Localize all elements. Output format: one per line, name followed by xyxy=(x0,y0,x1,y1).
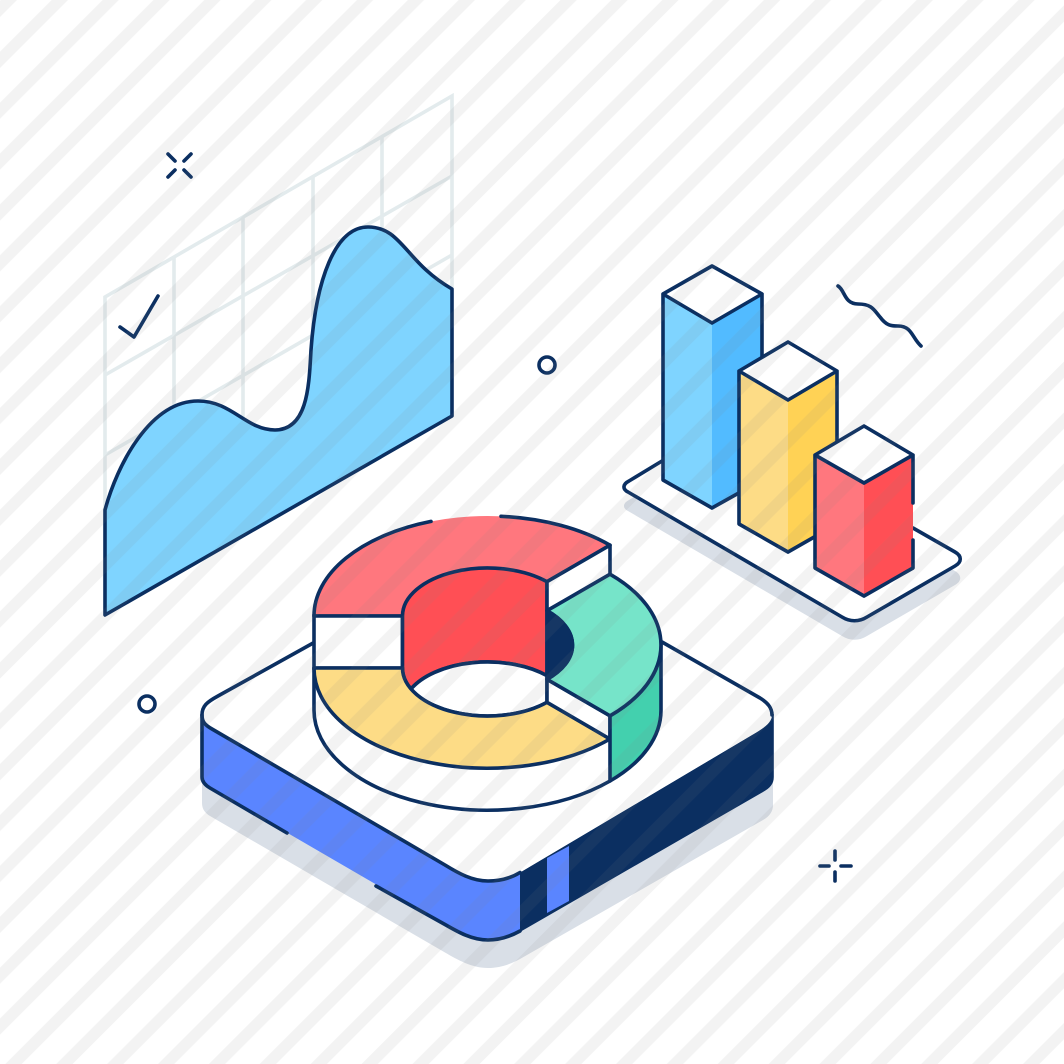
segment: red inner wall xyxy=(402,568,547,689)
segment: green side xyxy=(610,645,661,781)
icon: plus sparkle xyxy=(820,851,851,881)
area chart shape xyxy=(105,227,452,615)
segment: yellow cut face xyxy=(547,679,610,739)
segment: yellow xyxy=(314,668,610,768)
bar chart xyxy=(624,266,960,640)
area chart panel xyxy=(105,96,452,615)
platform top outline xyxy=(202,642,772,881)
platform shadow xyxy=(202,760,773,968)
icon: small circle top xyxy=(539,357,555,373)
segment: red top outline xyxy=(314,516,610,616)
platform side navy xyxy=(520,714,774,932)
platform base xyxy=(202,642,774,968)
red bar xyxy=(815,426,913,596)
blue bar xyxy=(663,266,762,508)
segment: red top xyxy=(314,516,610,616)
segment: red cut face left xyxy=(314,616,402,668)
chart grid xyxy=(105,96,452,510)
platform side blue xyxy=(202,715,520,940)
icon: small circle left xyxy=(139,696,155,712)
donut hole xyxy=(411,662,547,716)
platform bottom outline xyxy=(202,715,520,940)
yellow bar xyxy=(739,342,837,552)
plate shadow xyxy=(624,458,960,640)
segment: green top xyxy=(547,574,661,716)
plate outline xyxy=(624,461,960,621)
donut chart xyxy=(314,516,661,810)
segment: green inner dark xyxy=(547,611,573,679)
icon: x sparkle xyxy=(168,154,191,177)
icon: check mark xyxy=(120,296,158,337)
platform side blue stripe xyxy=(547,846,569,913)
bar chart plate xyxy=(624,439,960,621)
donut base outline xyxy=(314,668,610,810)
donut base white xyxy=(314,668,610,810)
platform top surface xyxy=(202,642,772,881)
icon: wavy line xyxy=(838,286,921,346)
segment: red cut face right xyxy=(547,545,610,611)
